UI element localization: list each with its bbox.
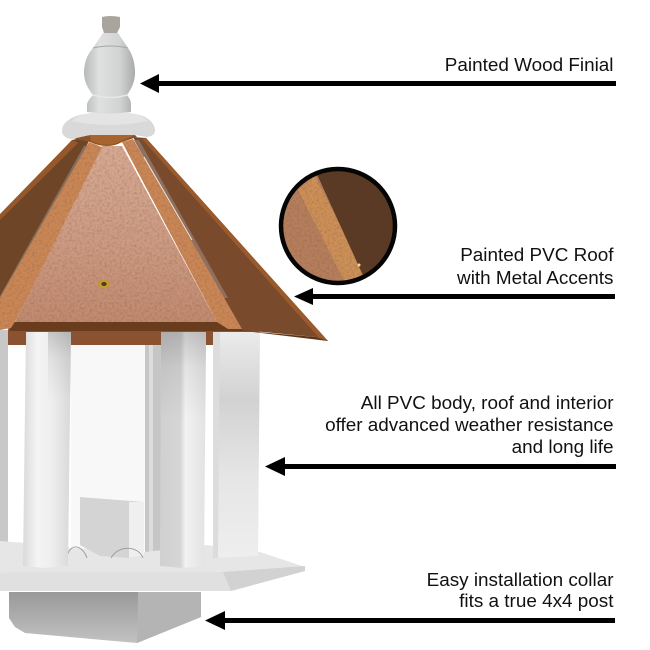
arrow: roof	[294, 288, 615, 305]
label: collar: fits a true 4x4 post	[459, 591, 614, 612]
finial	[62, 16, 155, 139]
right metal strip	[122, 139, 242, 329]
magnified dark panel	[318, 171, 393, 275]
magnified strip	[298, 176, 366, 282]
window view	[71, 345, 145, 550]
label: roof: with Metal Accents	[456, 268, 614, 289]
bird feeder illustration	[0, 16, 328, 643]
magnified roof detail circle	[278, 166, 400, 286]
front left post	[23, 330, 71, 568]
arrow: body	[265, 457, 616, 476]
arrow: finial	[140, 74, 616, 93]
label: body: offer advanced weather resistance	[325, 415, 614, 436]
finial base plate	[62, 114, 155, 139]
center copper panel	[15, 146, 217, 322]
right roof panel	[133, 137, 328, 341]
base platform	[0, 541, 305, 591]
finial tip	[102, 16, 120, 33]
label: collar: Easy installation collar	[427, 570, 614, 591]
label: roof: Painted PVC Roof	[460, 245, 614, 266]
arrow: collar	[205, 611, 615, 630]
label: body: and long life	[512, 437, 614, 458]
rear post	[145, 332, 161, 557]
mounting collar	[9, 592, 201, 643]
roof	[0, 135, 328, 345]
finial body	[84, 33, 135, 114]
feeder body: window and posts	[0, 330, 305, 643]
front center post	[160, 332, 206, 568]
label: finial: Painted Wood Finial	[445, 55, 614, 76]
left metal strip	[0, 142, 102, 330]
roof cap	[72, 135, 137, 146]
far post	[0, 330, 8, 555]
feed hopper	[80, 497, 144, 558]
left roof panel	[0, 136, 90, 306]
roof underside	[8, 322, 260, 345]
brass screw	[98, 280, 110, 288]
right post	[213, 332, 260, 558]
label: body: All PVC body, roof and interior	[361, 393, 614, 414]
